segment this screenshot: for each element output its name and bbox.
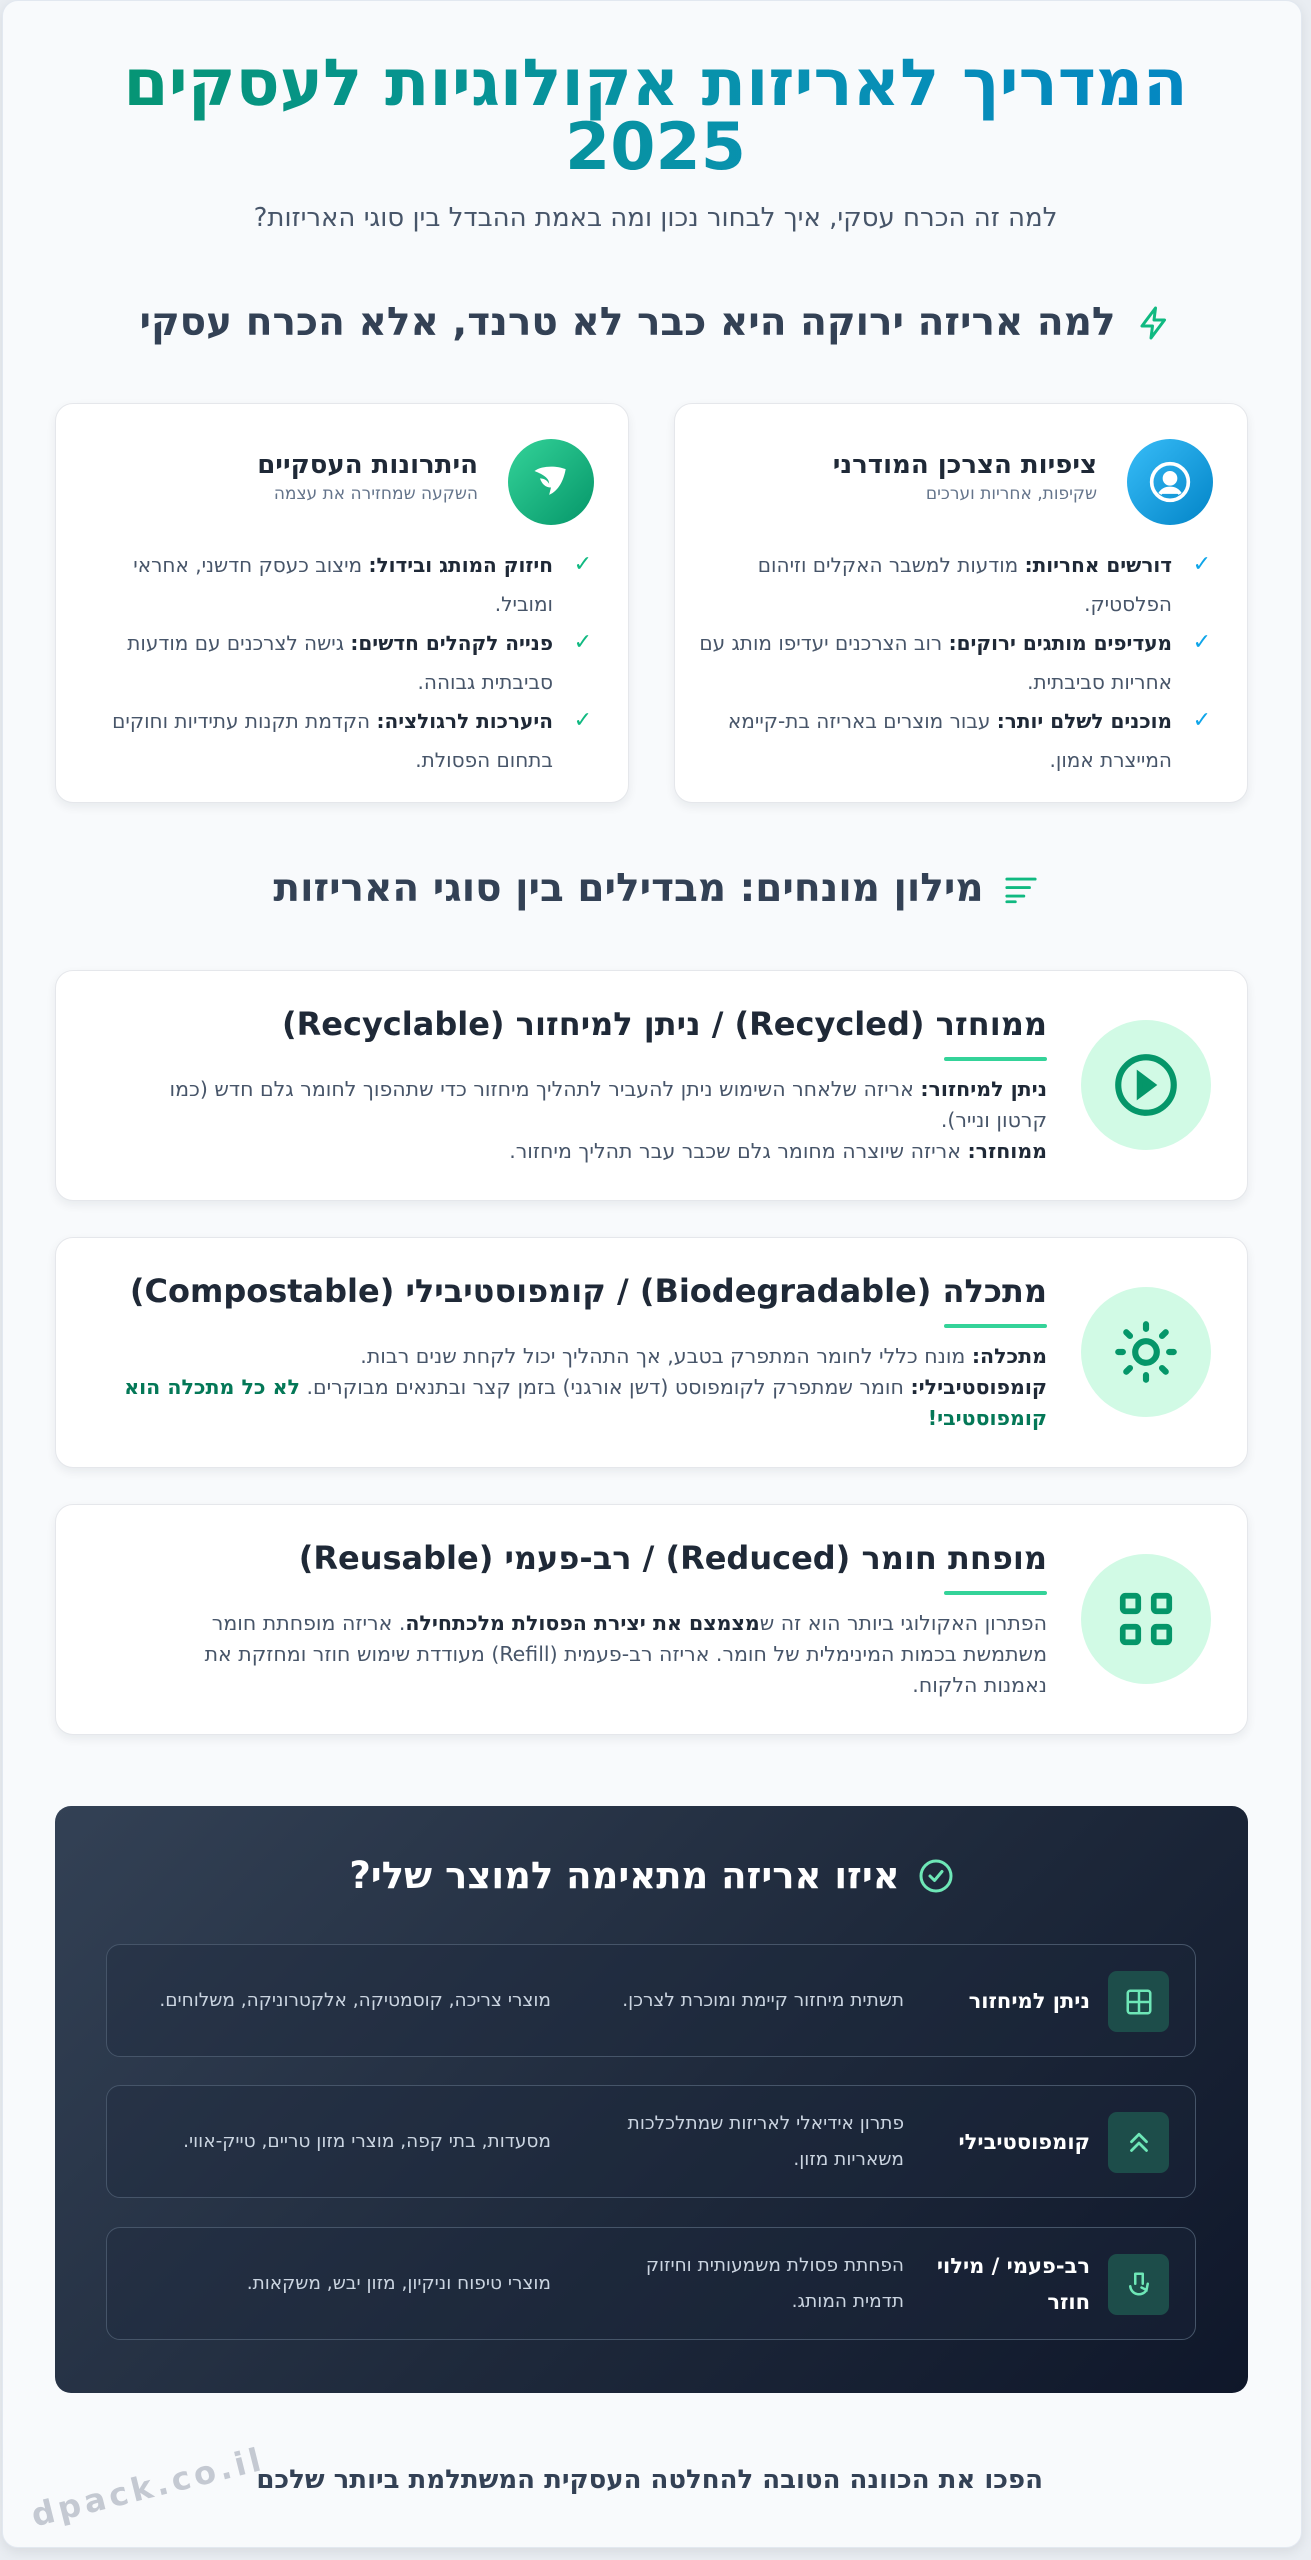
- list: דורשים אחריות: מודעות למשבר האקלים וזיהום הפלסטיק.: [758, 553, 1172, 616]
- row: reusable: [106, 2227, 1196, 2340]
- footer text: הפכו את הכוונה הטובה להחלטה העסקית המשתלמת ביותר שלכם: [256, 2465, 1043, 2495]
- panel: business advantages: ✓: [574, 552, 592, 577]
- title: מתכלה (Biodegradable) / קומפוסטיבילי (Compostable): [130, 1272, 1047, 1310]
- title: [0, 52, 1311, 180]
- heading: glossary: מילון מונחים: מבדילים בין סוגי האריזות: [273, 866, 984, 911]
- heading: why green packaging: למה אריזה ירוקה היא כבר לא טרנד, אלא הכרח עסקי: [139, 300, 1116, 345]
- title: 2025: [565, 110, 746, 185]
- icon: grid square: [1108, 1971, 1169, 2032]
- card heading: שקיפות, אחריות וערכים: [926, 484, 1097, 504]
- icon: lightning: [1140, 306, 1166, 340]
- list: פנייה לקהלים חדשים: גישה לצרכנים עם מודעות סביבתית גבוהה.: [127, 631, 553, 694]
- list: חיזוק המותג ובידול: מיצוב כעסק חדשני, אחראי ומוביל.: [133, 553, 553, 616]
- icon: recycle circle: [1081, 1020, 1211, 1150]
- body: ניתן למיחזור: אריזה שלאחר השימוש ניתן להעביר לתהליך מיחזור כדי שתהפוך לחומר גלם חדש (כמו קרטון ונייר).: [170, 1077, 1047, 1132]
- card heading: ציפיות הצרכן המודרני: [833, 450, 1097, 480]
- title: מופחת חומר (Reduced) / רב-פעמי (Reusable): [299, 1539, 1047, 1577]
- body: הפתרון האקולוגי ביותר הוא זה שמצמצם את יצירת הפסולת מלכתחילה. אריזה מופחתת חומר משתמשת בכמות המינימלית של חומר. אריזה רב-פעמית (Refill) מעודדת שימוש חוזר ומחזקת את נאמנות הלקוח.: [205, 1611, 1047, 1697]
- panel: consumer expectations: ✓: [1193, 708, 1211, 733]
- row: reusable: רב-פעמי / מילוי חוזר: [937, 2254, 1090, 2314]
- list: מעדיפים מותגים ירוקים: רוב הצרכנים יעדיפו מותג עם אחריות סביבתית.: [699, 631, 1172, 694]
- title: המדריך לאריזות אקולוגיות לעסקים: [123, 46, 1188, 121]
- panel: business advantages: ✓: [574, 630, 592, 655]
- glossary card: biodegradable: [55, 1237, 1248, 1468]
- icon: leaf: [508, 439, 594, 525]
- row: recyclable: תשתית מיחזור קיימת ומוכרת לצרכן.: [622, 1990, 904, 2010]
- icon: lines: [1005, 878, 1037, 904]
- row: recyclable: [106, 1944, 1196, 2057]
- card heading: [833, 450, 1097, 504]
- panel: consumer expectations: [674, 403, 1248, 803]
- subtitle: למה זה הכרח עסקי, איך לבחור נכון ומה באמת ההבדל בין סוגי האריזות?: [254, 203, 1057, 233]
- panel heading: איזו אריזה מתאימה למוצר שלי?: [349, 1854, 900, 1897]
- card heading: היתרונות העסקיים: [257, 450, 478, 480]
- row: compostable: קומפוסטיבילי: [958, 2130, 1090, 2154]
- body: מתכלה: מונח כללי לחומר המתפרק בטבע, אך התהליך יכול לקחת שנים רבות.: [360, 1344, 1047, 1368]
- glossary card: reduced: [55, 1504, 1248, 1735]
- list: [699, 553, 1172, 772]
- card heading: [257, 450, 478, 504]
- row: reusable: הפחתת פסולת משמעותית וחיזוק תדמית המותג.: [646, 2254, 904, 2312]
- panel: consumer expectations: ✓: [1193, 630, 1211, 655]
- row: compostable: פתרון אידיאלי לאריזות שמתלכלכות משאריות מזון.: [628, 2112, 904, 2170]
- panel: which packaging fits my product: [55, 1806, 1248, 2393]
- icon: grid: [1081, 1554, 1211, 1684]
- icon: refill: [1108, 2254, 1169, 2315]
- list: [112, 553, 553, 772]
- list: היערכות לרגולציה: הקדמת תקנות עתידיות וחוקים בתחום הפסולת.: [112, 709, 553, 772]
- body: קומפוסטיבילי: חומר שמתפרק לקומפוסט (דשן אורגני) בזמן קצר ובתנאים מבוקרים. לא כל מתכלה הוא קומפוסטיבי!: [124, 1375, 1047, 1430]
- title: ממוחזר (Recycled) / ניתן למיחזור (Recyclable): [282, 1005, 1047, 1043]
- row: compostable: מסעדות, בתי קפה, מוצרי מזון טריים, טייק-אווי.: [183, 2131, 551, 2152]
- icon: chevrons up: [1108, 2112, 1169, 2173]
- icon: sun: [1081, 1287, 1211, 1417]
- watermark: dpack.co.il: [27, 2440, 268, 2534]
- body: ממוחזר: אריזה שיוצרה מחומר גלם שכבר עבר תהליך מיחזור.: [509, 1139, 1047, 1163]
- body: [124, 1344, 1047, 1430]
- panel: consumer expectations: ✓: [1193, 552, 1211, 577]
- row: compostable: [106, 2085, 1196, 2198]
- icon: user: [1127, 439, 1213, 525]
- body: [170, 1077, 1047, 1163]
- panel: business advantages: [55, 403, 629, 803]
- glossary card: recyclable: [55, 970, 1248, 1201]
- row: recyclable: ניתן למיחזור: [969, 1988, 1090, 2012]
- row: reusable: מוצרי טיפוח וניקיון, מזון יבש, משקאות.: [247, 2273, 551, 2294]
- row: recyclable: מוצרי צריכה, קוסמטיקה, אלקטרוניקה, משלוחים.: [159, 1990, 551, 2011]
- card heading: השקעה שמחזירה את עצמה: [274, 484, 478, 504]
- list: מוכנים לשלם יותר: עבור מוצרים באריזה בת-קיימא המייצרת אמון.: [728, 709, 1172, 772]
- panel: business advantages: ✓: [574, 708, 592, 733]
